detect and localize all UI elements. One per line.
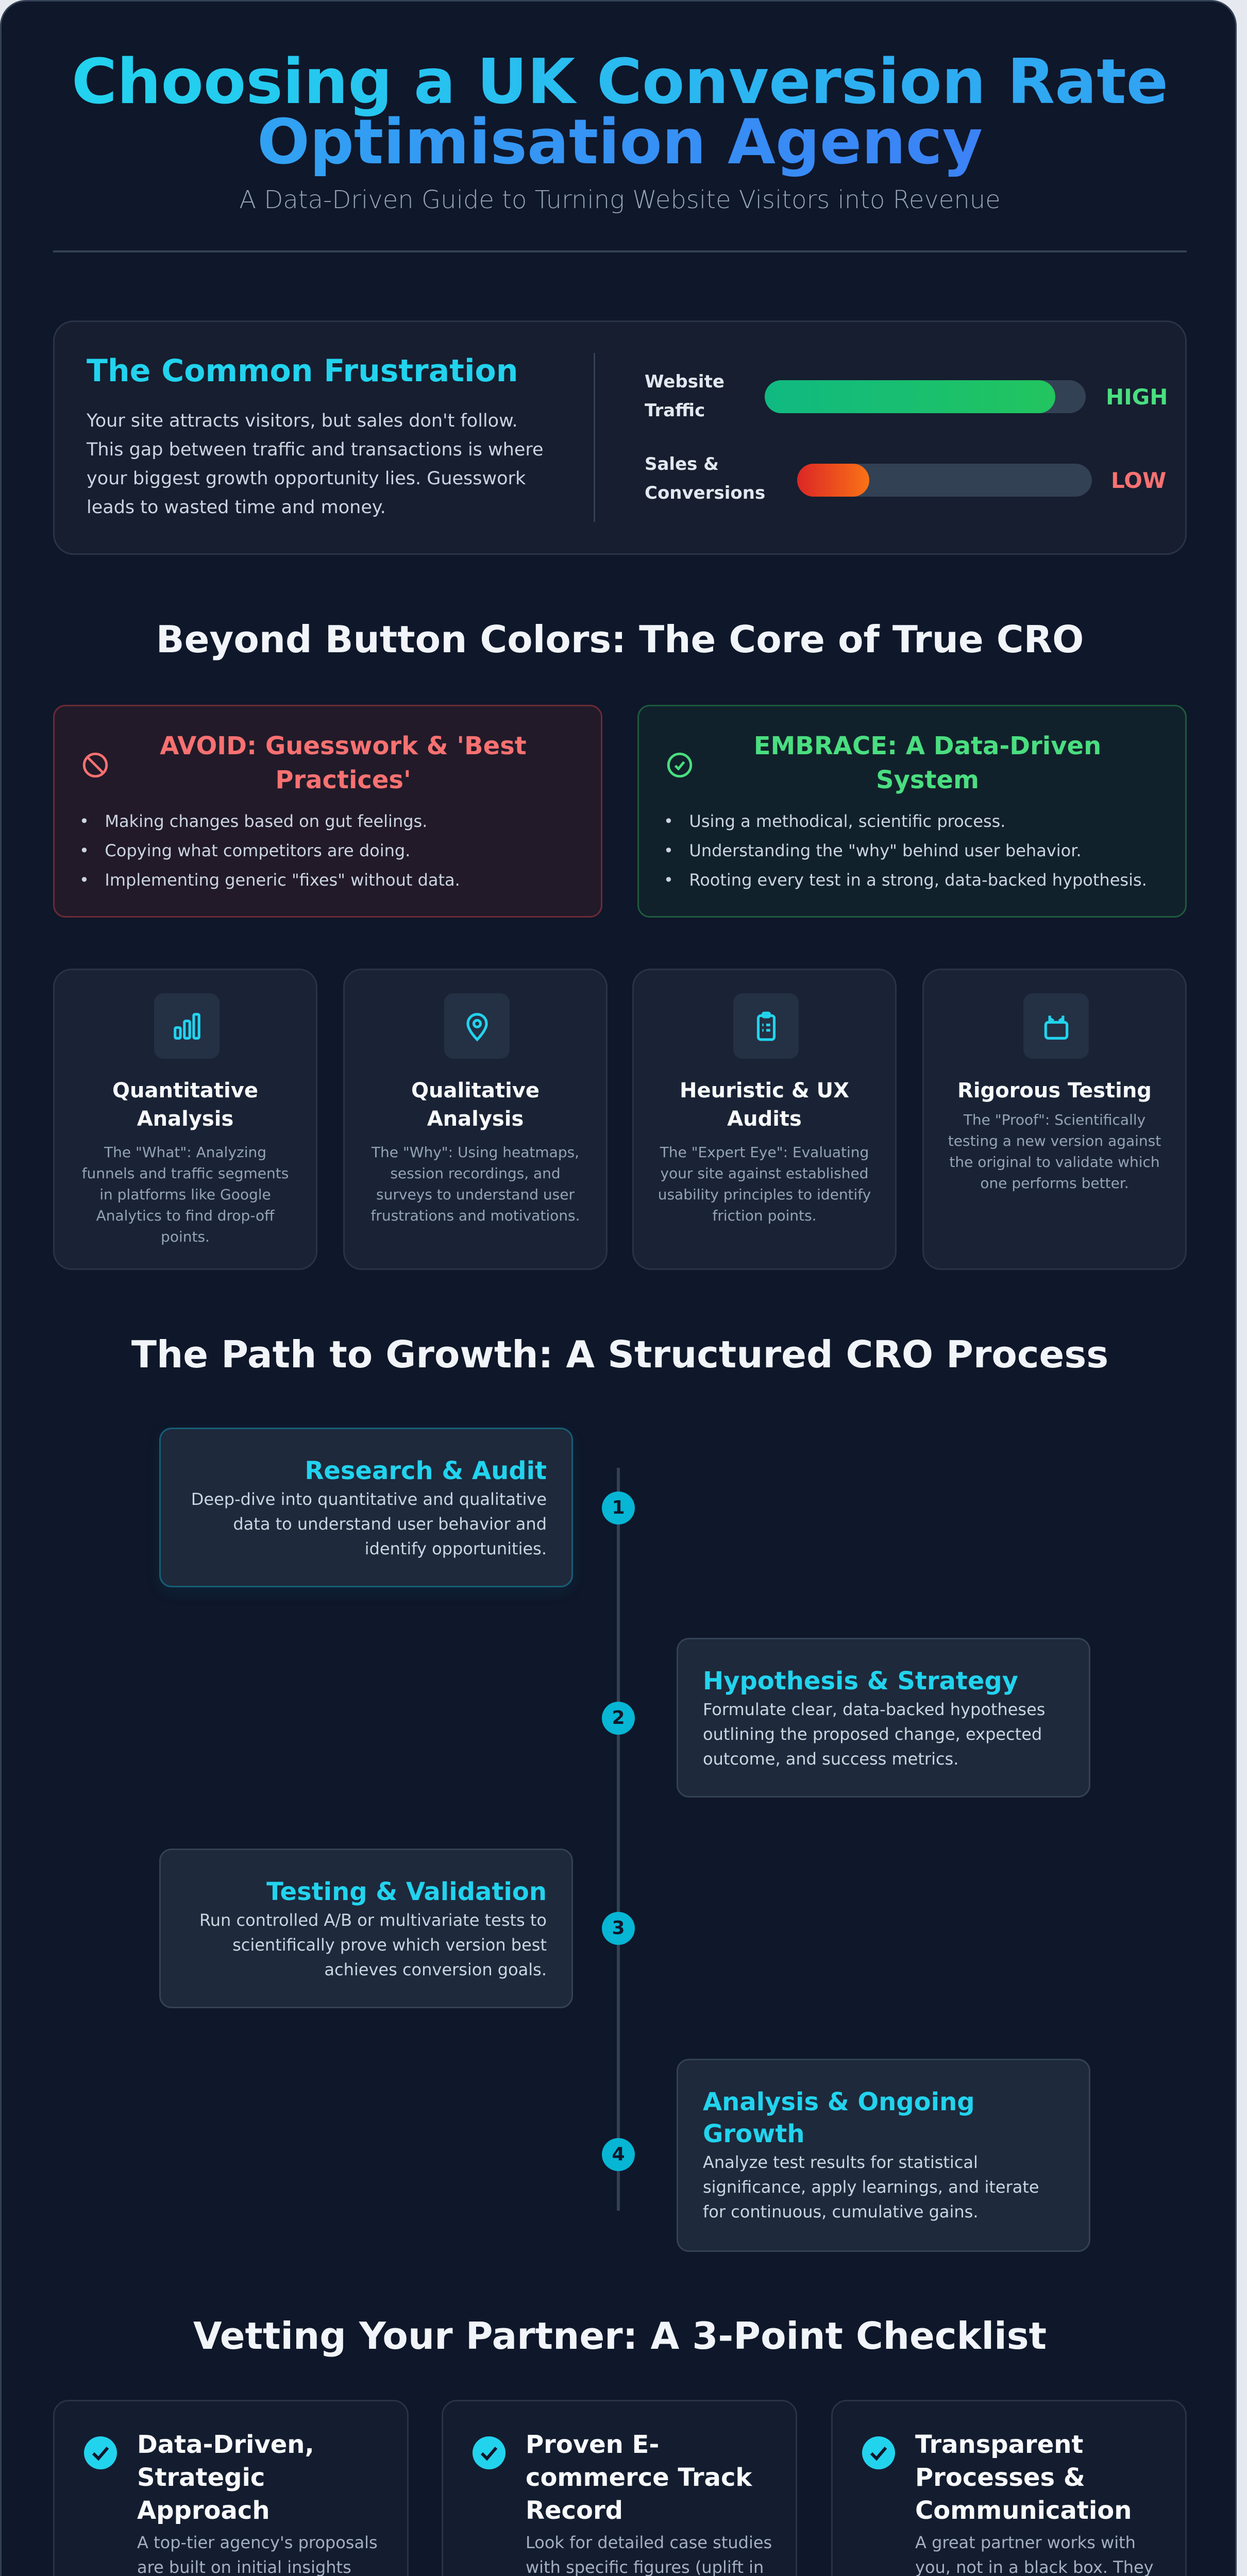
frustration text: leads to wasted time and money. [87,497,386,518]
frustration text: Your site attracts visitors, but sales don't follow. [87,411,518,431]
frustration text [87,411,544,518]
icon: prohibited [82,752,108,778]
card: quantitative: in platforms like Google [99,1186,271,1203]
embrace heading: System [876,766,979,794]
step 3: scientifically prove which version best [232,1935,547,1955]
checklist 3: A great partner works with [915,2533,1136,2552]
step 2: outlining the proposed change, expected [703,1724,1042,1744]
bar: website traffic: Website [645,371,724,392]
step 1: Research & Audit [305,1456,547,1485]
embrace list: • Using a methodical, scientific process. [664,811,1005,831]
card: qualitative: frustrations and motivations. [370,1207,580,1224]
panel: common frustration [53,320,1187,555]
step 1: data to understand user behavior and [233,1514,547,1534]
heading: path to growth: The Path to Growth: A Structured CRO Process [131,1333,1108,1376]
card: heuristic [632,969,897,1270]
marker 3 [602,1912,635,1945]
marker 4: 4 [612,2144,625,2165]
marker 2 [602,1702,635,1735]
checklist 3: Processes & [915,2463,1085,2492]
step 4 [677,2059,1090,2252]
avoid list: • Making changes based on gut feelings. [79,811,427,831]
avoid heading: Practices' [275,766,411,794]
title [72,46,1168,178]
frustration heading: The Common Frustration [87,353,518,389]
embrace list: • Understanding the "why" behind user behavior. [664,841,1082,860]
bar: sales & conversions [645,454,1166,503]
checklist 1: Approach [137,2496,270,2525]
title: Optimisation Agency [257,107,983,178]
card: qualitative: The "Why": Using heatmaps, [372,1144,579,1161]
frustration text: This gap between traffic and transactions is where [87,439,544,460]
card: testing: one performs better. [980,1175,1129,1192]
heading: vetting partner: Vetting Your Partner: A 3-Point Checklist [193,2314,1047,2358]
card: heuristic: usability principles to identify [658,1186,871,1203]
marker 4 [602,2138,635,2171]
icon: check [473,2436,505,2469]
card: qualitative: Analysis [427,1107,524,1131]
bar: sales & conversions: Conversions [645,483,765,503]
step 2 [677,1638,1090,1798]
avoid heading: AVOID: Guesswork & 'Best [160,732,527,760]
marker 2: 2 [612,1707,625,1728]
icon: clipboard [733,993,799,1059]
card: quantitative: funnels and traffic segments [82,1165,289,1182]
title: Choosing a UK Conversion Rate [72,46,1168,118]
embrace heading: EMBRACE: A Data-Driven [754,732,1101,760]
checklist 3: Transparent [915,2430,1083,2459]
checklist 2 [442,2400,797,2576]
icon: location pin [444,993,510,1059]
avoid list: • Implementing generic "fixes" without data. [79,870,460,890]
card: qualitative: session recordings, and [390,1165,561,1182]
step 2: outcome, and success metrics. [703,1749,958,1769]
card: testing: testing a new version against [948,1132,1161,1149]
card: quantitative: The "What": Analyzing [104,1144,266,1161]
step 4: significance, apply learnings, and iterate [703,2177,1039,2197]
icon: beaker [1023,993,1089,1059]
checklist 3: Communication [915,2496,1132,2525]
checklist 2: Proven E- [526,2430,659,2459]
panel: embrace [637,705,1187,918]
embrace heading [754,732,1101,794]
card: quantitative [53,969,317,1270]
step 4: Analyze test results for statistical [703,2153,978,2172]
icon: check circle [667,752,693,778]
checklist 2: Record [526,2496,623,2525]
checklist 2: Look for detailed case studies [526,2533,772,2552]
icon: bar chart [154,993,220,1059]
card: testing: Rigorous Testing [957,1079,1152,1103]
card: quantitative: Analytics to find drop-off [96,1207,274,1224]
card: qualitative: surveys to understand user [376,1186,575,1203]
marker 1: 1 [612,1497,625,1518]
avoid heading [160,732,527,794]
heading: beyond button colors: Beyond Button Colors: The Core of True CRO [156,618,1084,661]
timeline [159,1428,1090,2252]
checklist 1: Strategic [137,2463,265,2492]
card: heuristic: Audits [727,1107,802,1131]
checklist 2: commerce Track [526,2463,752,2492]
marker 3: 3 [612,1918,625,1939]
panel: avoid [53,705,602,918]
card: quantitative: Quantitative [112,1079,258,1103]
card: quantitative: Analysis [137,1107,233,1131]
step 3: achieves conversion goals. [324,1960,547,1979]
bar: website traffic: HIGH [1106,384,1168,410]
checklist 1: A top-tier agency's proposals [137,2533,378,2552]
card: heuristic: friction points. [712,1207,816,1224]
frustration text: your biggest growth opportunity lies. Guesswork [87,468,526,489]
card: testing: The "Proof": Scientifically [964,1111,1145,1128]
card: qualitative: Qualitative [411,1079,540,1103]
card: testing [922,969,1187,1270]
card: quantitative: points. [161,1228,210,1245]
embrace list: • Rooting every test in a strong, data-backed hypothesis. [664,870,1147,890]
avoid list [79,811,460,890]
step 1 [159,1428,573,1587]
embrace list [664,811,1147,890]
card: heuristic: The "Expert Eye": Evaluating [660,1144,869,1161]
step 2: Formulate clear, data-backed hypotheses [703,1700,1045,1719]
subtitle: A Data-Driven Guide to Turning Website Visitors into Revenue [239,185,1001,214]
bar: sales & conversions: Sales & [645,454,719,474]
step 3: Testing & Validation [266,1877,547,1906]
step 4: Analysis & Ongoing [703,2088,975,2116]
step 4: for continuous, cumulative gains. [703,2202,978,2222]
bar: website traffic [645,371,1168,421]
step 1: identify opportunities. [365,1539,547,1558]
card: heuristic: Heuristic & UX [680,1079,849,1103]
card: qualitative [343,969,608,1270]
marker 1 [602,1492,635,1524]
checklist 1: Data-Driven, [137,2430,314,2459]
step 3 [159,1849,573,2008]
step 4: Growth [703,2120,805,2148]
card: heuristic: your site against established [660,1165,869,1182]
step 3: Run controlled A/B or multivariate tests to [199,1910,547,1930]
bar: sales & conversions: LOW [1111,468,1166,493]
bar: website traffic: Traffic [645,400,705,421]
icon: check [84,2436,117,2469]
step 2: Hypothesis & Strategy [703,1667,1018,1696]
avoid list: • Copying what competitors are doing. [79,841,410,860]
card: testing: the original to validate which [949,1154,1160,1171]
step 1: Deep-dive into quantitative and qualitative [191,1489,547,1509]
icon: check [862,2436,895,2469]
checklist 3 [831,2400,1187,2576]
checklist 1 [53,2400,409,2576]
